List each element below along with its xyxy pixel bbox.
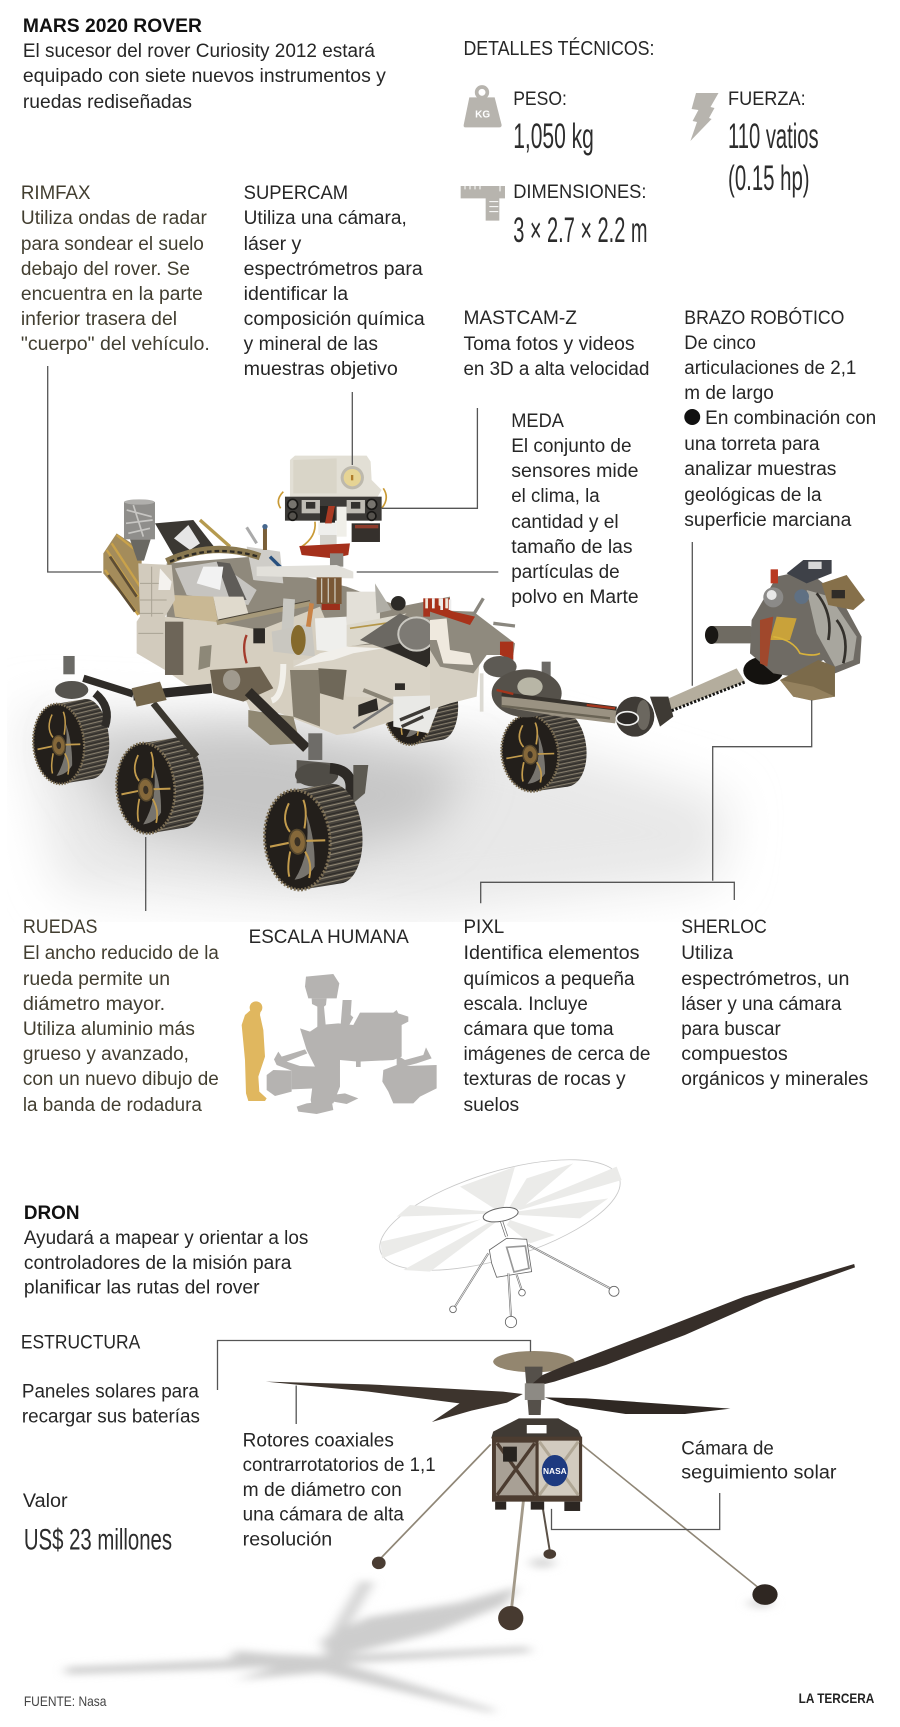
text block: PIXL: escala. Incluye: [463, 993, 588, 1015]
title: Mars 2020 Rover: equipado con siete nuevos instrumentos y: [23, 65, 386, 87]
drone: lower left blade: [266, 1382, 523, 1422]
text block: BRAZO ROBÓTICO: En combinación con: [705, 407, 876, 429]
rover: robotic arm: [483, 656, 745, 737]
text block: valor: US$ 23 millones: [24, 1523, 172, 1556]
text block: paneles solares: [22, 1381, 200, 1427]
text block: MASTCAM-Z: [463, 307, 649, 380]
text block: DRON: planificar las rutas del rover: [24, 1276, 260, 1299]
text block: BRAZO ROBÓTICO: superficie marciana: [684, 509, 852, 531]
text: dimensiones: DIMENSIONES:: [513, 181, 646, 203]
text block: rotores coaxiales: resolución: [243, 1529, 332, 1551]
drone: mast: [525, 1367, 543, 1415]
text block: rotores coaxiales: Rotores coaxiales: [243, 1429, 394, 1451]
text: dimensiones: [513, 181, 647, 250]
logo: La Tercera: LA TERCERA: [799, 1690, 874, 1706]
text block: valor: [23, 1490, 172, 1556]
text block: PIXL: [463, 916, 650, 1116]
text block: SHERLOC: SHERLOC: [681, 916, 767, 938]
text block: BRAZO ROBÓTICO: BRAZO ROBÓTICO: [684, 306, 844, 329]
text block: RUEDAS: diámetro mayor.: [23, 993, 165, 1015]
text block: RUEDAS: RUEDAS: [23, 916, 97, 938]
text block: PIXL: imágenes de cerca de: [463, 1043, 650, 1065]
text block: SHERLOC: para buscar: [681, 1018, 781, 1040]
text block: RUEDAS: grueso y avanzado,: [23, 1043, 189, 1065]
text block: MEDA: partículas de: [511, 561, 620, 583]
rover: wheel front left: [260, 781, 367, 893]
text block: RUEDAS: la banda de rodadura: [23, 1094, 202, 1116]
text block: SUPERCAM: y mineral de las: [244, 333, 378, 355]
text block: BRAZO ROBÓTICO: analizar muestras: [684, 458, 837, 480]
leader line: SUPERCAM: [351, 392, 353, 465]
rover: right side of chassis: [430, 598, 515, 712]
text block: MEDA: polvo en Marte: [511, 586, 639, 608]
text: fuerza: [728, 88, 819, 198]
rover: wheel middle left: [112, 735, 208, 837]
text block: SUPERCAM: composición química: [244, 308, 425, 330]
text block: RIMFAX: inferior trasera del: [21, 308, 177, 330]
text block: PIXL: Identifica elementos: [463, 942, 640, 964]
text: fuerza: 110 vatios: [728, 117, 819, 156]
silhouette: rover: [267, 974, 437, 1114]
drone: legs and feet: [372, 1433, 778, 1630]
rover: main chassis: [103, 499, 450, 745]
text block: rotores coaxiales: m de diámetro con: [243, 1479, 402, 1501]
icon: weight: [464, 87, 502, 127]
title: Mars 2020 Rover: El sucesor del rover Curiosity 2012 estará: [23, 40, 375, 62]
illustration: Mars 2020 rover: [30, 456, 865, 893]
heading: estructura: ESTRUCTURA: [21, 1332, 140, 1354]
text block: DRON: DRON: [24, 1202, 80, 1224]
text block: MEDA: El conjunto de: [511, 435, 632, 457]
text block: paneles solares: Paneles solares para: [22, 1381, 199, 1403]
text: peso: 1,050 kg: [513, 117, 594, 156]
drone: frame top: [491, 1418, 582, 1438]
text block: cámara de seguimiento solar: [681, 1437, 837, 1484]
text: peso: [513, 88, 594, 156]
text: peso: PESO:: [513, 88, 567, 110]
heading: detalles técnicos: DETALLES TÉCNICOS:: [463, 37, 654, 60]
text block: RIMFAX: [21, 182, 210, 355]
title: Mars 2020 Rover: ruedas rediseñadas: [23, 91, 192, 113]
drone: lower right blade: [545, 1397, 730, 1414]
rover ground shadow: [20, 710, 730, 915]
text block: PIXL: PIXL: [463, 916, 504, 938]
text block: MEDA: MEDA: [511, 410, 564, 432]
text: fuerza: FUERZA:: [728, 88, 806, 110]
text block: paneles solares: recargar sus baterías: [22, 1405, 200, 1427]
text block: SHERLOC: orgánicos y minerales: [681, 1068, 869, 1090]
text block: PIXL: químicos a pequeña: [463, 968, 635, 990]
text block: rotores coaxiales: [243, 1429, 436, 1551]
text block: cámara de seguimiento solar: Cámara de: [681, 1437, 774, 1459]
text block: MEDA: el clima, la: [511, 485, 600, 507]
text block: MASTCAM-Z: en 3D a alta velocidad: [463, 358, 649, 380]
text block: RIMFAX: para sondear el suelo: [21, 233, 204, 255]
rover: rear right wheel: [380, 662, 462, 748]
text block: RUEDAS: [23, 916, 219, 1116]
text: fuerza: (0.15 hp): [728, 159, 810, 198]
text block: MASTCAM-Z: Toma fotos y videos: [463, 333, 635, 355]
text block: MEDA: cantidad y el: [511, 511, 619, 533]
leader line: MASTCAM-Z: [382, 408, 477, 508]
panel: detalles técnicos: [461, 37, 819, 250]
rover: wheel rear left: [30, 697, 113, 787]
icon: weight: KG: [475, 110, 490, 121]
text block: SHERLOC: espectrómetros, un: [681, 968, 849, 990]
title: Mars 2020 Rover: MARS 2020 ROVER: [23, 15, 202, 37]
drone: rotors and body: [266, 1264, 855, 1511]
text: dimensiones: 3 × 2.7 × 2.2 m: [513, 211, 647, 250]
text block: SUPERCAM: SUPERCAM: [244, 182, 348, 204]
text block: SHERLOC: láser y una cámara: [681, 993, 842, 1015]
text block: valor: Valor: [23, 1490, 68, 1512]
text block: MEDA: sensores mide: [511, 460, 639, 482]
heading: escala humana: ESCALA HUMANA: [249, 926, 409, 948]
leader line: brazo robótico: [691, 542, 693, 686]
drone shadow on ground: [66, 1581, 531, 1713]
text block: RIMFAX: debajo del rover. Se: [21, 258, 190, 280]
text block: RIMFAX: encuentra en la parte: [21, 283, 203, 305]
text block: BRAZO ROBÓTICO: [684, 306, 876, 531]
text block: MASTCAM-Z: MASTCAM-Z: [463, 307, 577, 329]
text block: SHERLOC: [681, 916, 869, 1090]
illustration: drone line drawing with spinning rotor: [368, 1137, 632, 1328]
text block: RIMFAX: "cuerpo" del vehículo.: [21, 333, 210, 355]
text block: BRAZO ROBÓTICO: geológicas de la: [684, 484, 822, 506]
drone: feet of box: [495, 1502, 580, 1511]
leader line: MEDA: [357, 571, 498, 573]
rover: front right wheel: [498, 708, 590, 794]
text block: BRAZO ROBÓTICO: articulaciones de 2,1: [684, 357, 856, 379]
drone: body box: [492, 1437, 582, 1502]
illustration: Mars helicopter drone: [266, 1264, 855, 1630]
text block: BRAZO ROBÓTICO: una torreta para: [684, 433, 820, 455]
text block: PIXL: suelos: [463, 1094, 519, 1116]
text block: MEDA: [511, 410, 639, 608]
text block: DRON: Ayudará a mapear y orientar a los: [24, 1227, 309, 1249]
text block: cámara de seguimiento solar: seguimiento solar: [681, 1462, 837, 1484]
text block: SUPERCAM: láser y: [244, 233, 302, 255]
icon: measuring tape: [461, 186, 505, 221]
text block: RUEDAS: con un nuevo dibujo de: [23, 1068, 219, 1090]
chart: human scale silhouettes: [242, 974, 437, 1114]
drone foot shadows: [530, 1558, 773, 1608]
drone: solar panel disc: [493, 1351, 575, 1372]
icon: lightning bolt: [690, 93, 718, 141]
text block: BRAZO ROBÓTICO: m de largo: [684, 382, 774, 404]
rover: arm turret: [705, 560, 865, 701]
leader line: ruedas: [145, 837, 147, 911]
text block: SUPERCAM: muestras objetivo: [244, 358, 398, 380]
silhouette: person: [242, 1001, 267, 1101]
rover: suspension arms: [55, 656, 368, 803]
drone: NASA logo: [542, 1455, 568, 1486]
title: Mars 2020 Rover: [23, 15, 386, 113]
text block: DRON: controladores de la misión para: [24, 1252, 292, 1274]
text block: RUEDAS: Utiliza aluminio más: [23, 1018, 195, 1040]
text block: SUPERCAM: [244, 182, 425, 380]
leader line: turret to PIXL and SHERLOC: [713, 700, 812, 881]
text block: PIXL: texturas de rocas y: [463, 1068, 626, 1090]
text block: SHERLOC: Utiliza: [681, 942, 733, 964]
leader line: paneles solares: [218, 1340, 530, 1390]
text block: RIMFAX: RIMFAX: [21, 182, 91, 204]
leader bracket: PIXL and SHERLOC: [481, 882, 734, 903]
leader line: cámara: [552, 1493, 720, 1530]
text block: SUPERCAM: identificar la: [244, 283, 348, 305]
text block: PIXL: cámara que toma: [463, 1018, 614, 1040]
text block: RUEDAS: El ancho reducido de la: [23, 942, 219, 964]
leader line: rotores: [295, 1386, 297, 1424]
text block: MEDA: tamaño de las: [511, 536, 633, 558]
text block: BRAZO ROBÓTICO: De cinco: [684, 332, 756, 354]
text block: rotores coaxiales: contrarrotatorios de 1,1: [243, 1454, 436, 1476]
text block: RIMFAX: Utiliza ondas de radar: [21, 207, 207, 229]
text block: SHERLOC: compuestos: [681, 1043, 788, 1065]
rover: mast head: [257, 456, 386, 604]
drone: upper blade: [527, 1264, 855, 1388]
text block: SUPERCAM: Utiliza una cámara,: [244, 207, 407, 229]
text block: DRON: [24, 1202, 309, 1299]
drone: NASA logo: NASA: [543, 1467, 567, 1476]
source: FUENTE: Nasa: [24, 1693, 107, 1709]
text block: rotores coaxiales: una cámara de alta: [243, 1504, 404, 1526]
text block: SUPERCAM: espectrómetros para: [244, 258, 423, 280]
text block: RUEDAS: rueda permite un: [23, 968, 170, 990]
leader line: RIMFAX: [48, 366, 102, 572]
